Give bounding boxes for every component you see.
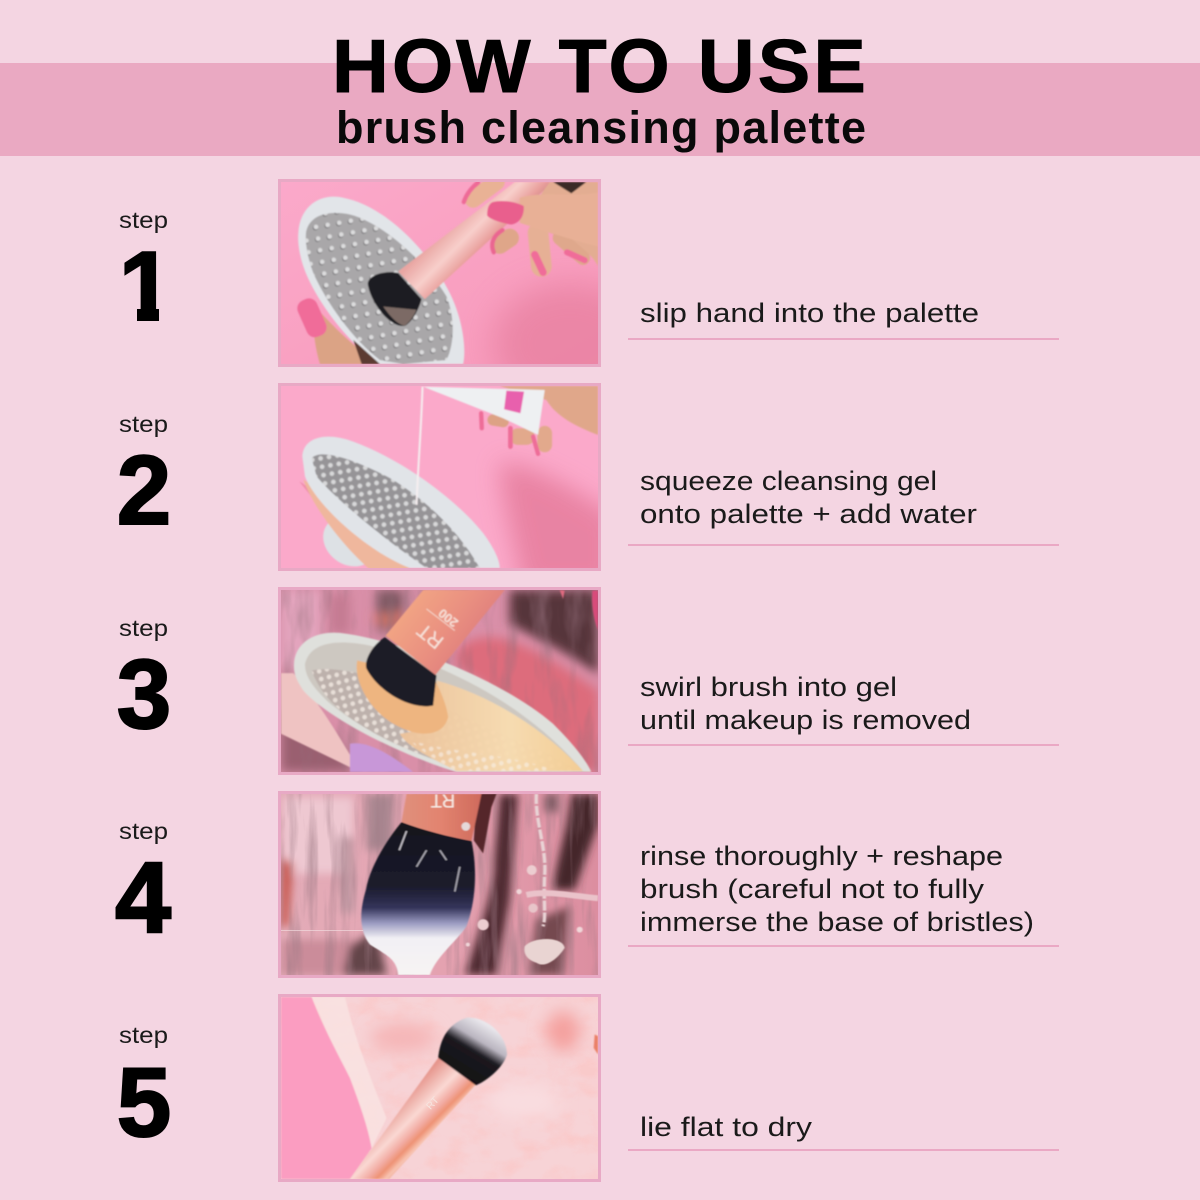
step 1 number: 1 <box>119 231 173 341</box>
step 3 text block: swirl brush into gel <box>640 672 897 702</box>
photo: rinsing brush under water <box>278 791 601 978</box>
photo: swirling brush in gel: RT <box>412 618 448 653</box>
step 1 rule <box>628 338 1059 340</box>
photo: hand in palette with brush <box>278 179 601 367</box>
step 1 number <box>120 212 167 321</box>
step 1 number: step <box>119 207 168 233</box>
header banner band <box>0 63 1200 156</box>
title: brush cleansing palette <box>336 102 866 153</box>
step 4 text block: rinse thoroughly + reshape <box>640 841 1003 871</box>
step 2 text block <box>640 466 977 529</box>
step 4 text block <box>640 841 1034 937</box>
photo: swirling brush in gel: 200 <box>436 606 461 630</box>
step 4 number: 4 <box>115 842 171 954</box>
step 4 text block: immerse the base of bristles) <box>640 907 1034 937</box>
step 5 rule <box>628 1149 1059 1150</box>
step 5 text block: lie flat to dry <box>640 1112 813 1142</box>
step 1 text block: slip hand into the palette <box>640 298 979 328</box>
step 5 number: 5 <box>117 1047 171 1157</box>
photo: swirling brush in gel <box>278 587 601 775</box>
step 2 rule <box>628 544 1059 546</box>
step 4 rule <box>628 945 1059 946</box>
step 4 number: step <box>119 818 168 844</box>
title <box>332 24 869 153</box>
step 2 text block: squeeze cleansing gel <box>640 466 937 496</box>
title: HOW TO USE <box>332 24 869 108</box>
step labels and numbers <box>115 207 172 1157</box>
step 2 number: 2 <box>117 435 171 545</box>
step 3 number: step <box>119 615 168 641</box>
step 2 text block: onto palette + add water <box>640 499 977 529</box>
step 4 text block: brush (careful not to fully <box>640 874 985 904</box>
step 3 text block <box>640 672 971 735</box>
step 3 number: 3 <box>117 639 171 749</box>
step 3 rule <box>628 744 1059 746</box>
photo: brush lying flat on towel: RT <box>425 1095 442 1112</box>
step 2 number: step <box>119 411 168 437</box>
photo: squeezing cleansing gel <box>278 383 601 571</box>
step 3 text block: until makeup is removed <box>640 705 971 735</box>
step 5 number: step <box>119 1022 168 1048</box>
photo: brush lying flat on towel <box>278 994 601 1182</box>
